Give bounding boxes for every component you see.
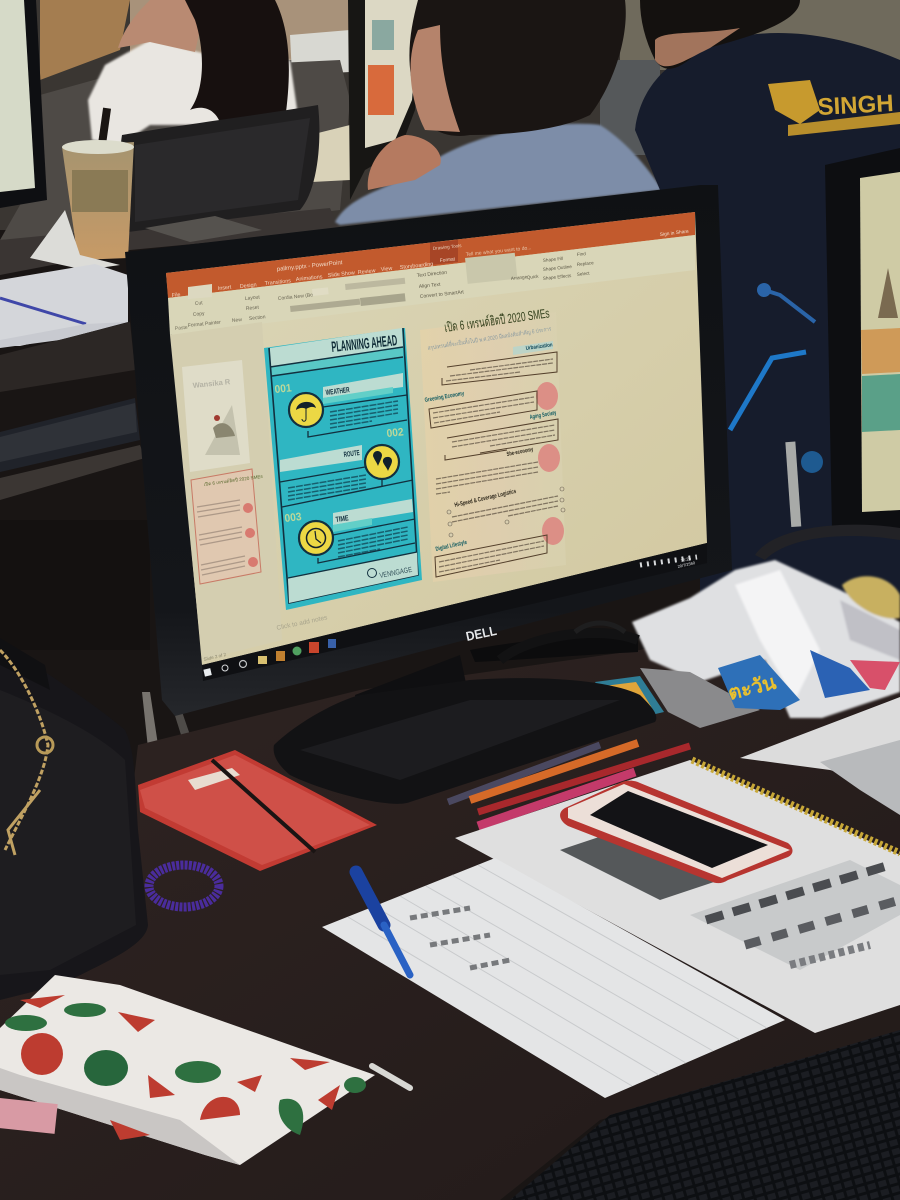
monitor bezel <box>125 185 732 716</box>
thumbnail: slide one <box>182 360 250 472</box>
infographic: planning ahead: PLANNING AHEAD <box>331 332 398 356</box>
windows taskbar: 20/7/2560 <box>677 560 696 569</box>
powerpoint title bar: File <box>172 292 181 299</box>
left desk shelf and keyboard <box>0 322 190 748</box>
trend: urbanization <box>442 341 557 385</box>
open notebook on left desk <box>0 264 128 348</box>
pens <box>448 743 690 826</box>
section 001: weather: WEATHER <box>325 385 350 397</box>
ribbon <box>168 235 695 335</box>
icon: map pins <box>365 445 399 479</box>
ribbon: Select <box>577 271 591 277</box>
keyboard foreground <box>510 1030 900 1200</box>
trend: urbanization: Urbanization <box>525 342 554 352</box>
purple coil bracelet <box>149 865 219 907</box>
man in navy Singha shirt <box>635 0 900 600</box>
black office chair <box>120 105 319 232</box>
powerpoint title bar: Transitions <box>265 278 292 287</box>
trend: greening economy <box>424 390 537 428</box>
ribbon: Layout <box>245 294 261 302</box>
thumbnail: slide one: Wansika R <box>192 377 231 390</box>
ribbon: New <box>232 317 243 324</box>
ribbon: Reset <box>246 305 260 312</box>
white plastic bag <box>632 560 900 718</box>
powerpoint title bar: Sign in <box>660 230 675 238</box>
ribbon: Copy <box>193 311 205 318</box>
ribbon: Format Painter <box>188 320 221 329</box>
trend: greening economy: Greening Economy <box>424 390 465 404</box>
powerpoint title bar: Insert <box>218 285 232 292</box>
windows taskbar <box>202 543 707 681</box>
slide thumbnail pane <box>170 322 282 660</box>
zipper pull <box>372 1066 410 1088</box>
powerpoint title bar: Slide Show <box>328 270 355 279</box>
ribbon: Arrange <box>511 274 528 281</box>
venngage footer: VENNGAGE <box>379 565 413 580</box>
windows taskbar: 15:25 <box>680 556 692 563</box>
trend: aging society <box>445 410 558 460</box>
iced coffee cup <box>30 108 134 270</box>
pink circle <box>538 444 560 472</box>
red smartphone <box>560 781 792 883</box>
monitor stand <box>274 655 656 804</box>
section 002: route <box>280 426 413 507</box>
trend: hi-speed and coverage logistics: Hi-Speed & Coverage Logistics <box>454 488 517 509</box>
red notebook <box>138 750 377 871</box>
cable bundle <box>470 635 638 662</box>
woman in white shirt <box>88 0 350 182</box>
ribbon: Cordia New (Bo <box>278 292 314 302</box>
infographic: planning ahead <box>264 328 422 610</box>
watermelon pouch <box>0 975 410 1165</box>
powerpoint title bar: View <box>381 266 393 273</box>
trend: digital lifestyle: Digital Lifestyle <box>435 540 468 553</box>
background monitor behind center <box>348 0 425 200</box>
ribbon: Convert to SmartArt <box>420 289 465 300</box>
powerpoint title bar: Format <box>440 256 456 264</box>
pink circle <box>536 382 558 410</box>
screen <box>166 212 707 665</box>
section 003: time <box>284 499 415 563</box>
ribbon: Align Text <box>419 282 441 290</box>
ribbon: Shape Fill <box>543 256 563 263</box>
notes placeholder: Click to add notes <box>276 614 329 632</box>
pink circle <box>542 517 564 545</box>
slide: 2020 SME trends <box>420 305 566 582</box>
section 002: route: 002 <box>386 426 404 440</box>
powerpoint title bar: Animations <box>296 274 323 283</box>
ribbon: Quick <box>527 274 539 280</box>
man in blue shirt <box>335 0 662 225</box>
status bar: Slide 2 of 2 <box>203 652 227 662</box>
snack packet label: ตะวัน <box>726 672 779 705</box>
powerpoint title bar: Share <box>676 229 689 236</box>
powerpoint title bar: Storyboarding <box>400 262 434 271</box>
slide title: เปิด 6 เทรนด์ฮิตปี 2020 SMEs <box>443 305 551 335</box>
white printed worksheet <box>455 697 900 1033</box>
monitor cables <box>500 623 638 660</box>
snack packets <box>595 650 900 728</box>
icon: clock <box>299 521 333 555</box>
ribbon: Paste <box>175 325 188 332</box>
section 003: time: TIME <box>335 513 349 524</box>
spiral binding <box>692 760 900 853</box>
ribbon: Text Direction <box>417 270 448 279</box>
ribbon: Cut <box>195 300 204 307</box>
section 001: weather: 001 <box>274 382 292 396</box>
ribbon: Shape Outline <box>543 264 573 272</box>
ribbon: Section <box>249 314 266 322</box>
venngage footer <box>288 552 418 603</box>
desk surface <box>0 620 900 1200</box>
powerpoint title bar: Drawing Tools <box>433 243 462 251</box>
right background monitor <box>755 148 900 560</box>
section 002: route: ROUTE <box>343 448 360 459</box>
trend: digital lifestyle <box>435 535 547 577</box>
slide subtitle: สรุปเทรนด์ที่จะเป็นทั้งในปี พ.ศ.2020 มีผลบังคับสำคัญ 6 ประการ <box>427 324 552 352</box>
trend: aging society: Aging Society <box>529 410 557 421</box>
section 003: time: 003 <box>284 511 302 525</box>
trend: hi-speed and coverage logistics <box>447 487 565 537</box>
left background monitor <box>0 0 47 208</box>
thumbnail: slide two <box>191 469 264 584</box>
tablet on desk <box>145 216 262 242</box>
powerpoint title bar <box>166 212 695 299</box>
powerpoint title bar: Tell me what you want to do... <box>466 245 532 258</box>
shirt logo wordmark: SINGH <box>817 90 894 121</box>
monitor <box>125 185 732 716</box>
dell logo: DELL <box>465 623 498 644</box>
shirt logo lion <box>768 80 820 124</box>
header band <box>270 328 403 367</box>
ribbon: Shape Effects <box>543 273 572 281</box>
powerpoint title bar: pallmy.pptx - PowerPoint <box>277 260 343 273</box>
icon: umbrella <box>289 393 323 427</box>
ribbon: Find <box>577 251 586 257</box>
powerpoint title bar: Design <box>240 282 257 290</box>
black handbag <box>0 638 148 1000</box>
trend: she-economy: She-economy <box>506 447 534 458</box>
blue pen <box>356 872 410 975</box>
powerpoint title bar: Home <box>194 289 209 296</box>
teal panel <box>264 328 422 610</box>
trend: she-economy <box>436 447 538 494</box>
lined paper with handwriting <box>322 858 785 1098</box>
ribbon: Replace <box>577 260 594 267</box>
section 001: weather <box>274 373 407 437</box>
thumbnail: slide two: เปิด 6 เทรนด์ฮิตปี 2020 SMEs <box>203 473 264 487</box>
powerpoint title bar: Review <box>358 268 376 276</box>
